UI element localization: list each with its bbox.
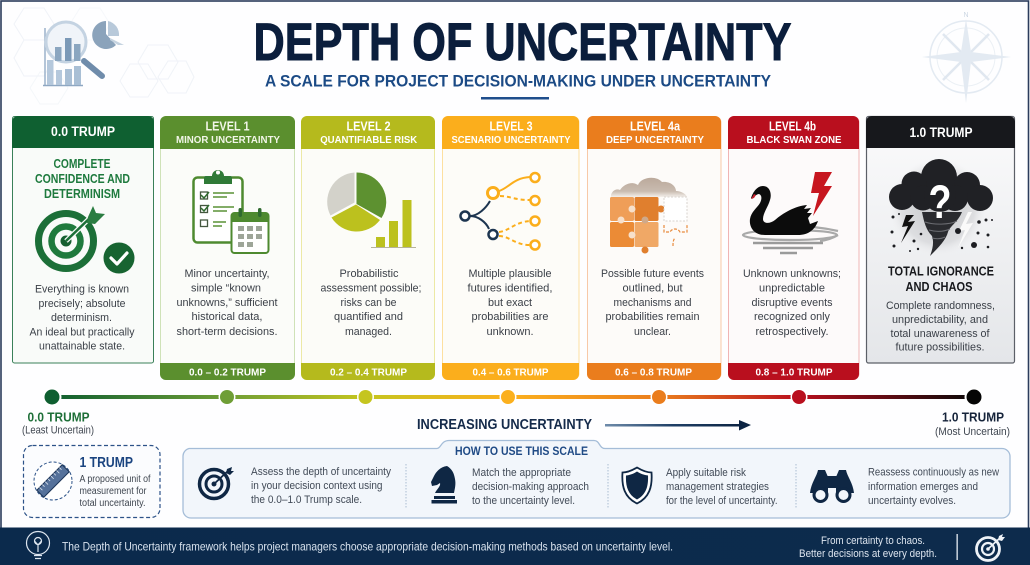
description [468, 268, 552, 338]
description: managed. [345, 326, 392, 338]
footer range [728, 363, 859, 380]
footer range [301, 363, 435, 380]
panel heading [35, 157, 130, 201]
panel: Level 4a [587, 116, 721, 380]
icon: footer target [976, 534, 1005, 560]
header [587, 116, 721, 149]
step text: uncertainty evolves. [868, 495, 956, 507]
description [601, 268, 704, 338]
step text [868, 466, 999, 507]
step text: information emerges and [868, 481, 978, 493]
panel: 1.0 Trump [866, 116, 1015, 363]
title: DEPTH OF UNCERTAINTY [254, 13, 792, 72]
step 2: match [431, 466, 589, 507]
icon: black swan and lightning [743, 172, 838, 253]
footer tagline: Better decisions at every depth. [799, 548, 937, 560]
step text [251, 466, 392, 506]
description: assessment possible; [320, 282, 422, 294]
header label [176, 120, 280, 146]
description: unclear. [634, 326, 671, 338]
description: Possible future events [601, 268, 704, 280]
callout text: A proposed unit of [80, 474, 151, 485]
description: short-term decisions. [176, 326, 278, 338]
icon: puzzle under cloud [610, 178, 687, 254]
step text [472, 467, 589, 507]
description: probabilities are [472, 311, 548, 323]
footer range: 0.4 – 0.6 TRUMP [472, 366, 548, 378]
panel: Level 2 [301, 116, 435, 380]
icon: target [200, 467, 234, 498]
header label: LEVEL 1 [206, 120, 250, 134]
footer tagline: From certainty to chaos. [821, 535, 925, 547]
header label [746, 120, 842, 146]
footer range [442, 363, 579, 380]
description: determinism. [51, 312, 112, 324]
increasing uncertainty label: INCREASING UNCERTAINTY [417, 417, 592, 433]
right scale label: 1.0 TRUMP [942, 410, 1004, 424]
panel heading: AND CHAOS [906, 280, 972, 294]
step text: Match the appropriate [472, 467, 571, 479]
description: futures identified, [468, 282, 552, 294]
description: An ideal but practically [30, 326, 135, 338]
footer range: 0.0 – 0.2 TRUMP [189, 366, 266, 378]
icon: clipboard and calendar [194, 170, 269, 253]
header [301, 116, 435, 149]
callout text: total uncertainty. [80, 498, 146, 509]
callout heading: 1 TRUMP [80, 455, 133, 471]
description: unknown. [486, 326, 534, 338]
footer range: 0.8 – 1.0 TRUMP [756, 366, 832, 378]
header label: LEVEL 2 [346, 120, 391, 134]
icon: pie chart and bars [327, 172, 416, 248]
description [30, 284, 135, 352]
footer range [160, 363, 295, 380]
callout: 1 Trump definition [24, 446, 160, 518]
description: unattainable state. [39, 340, 125, 352]
header [442, 116, 579, 149]
description: retrospectively. [756, 326, 828, 338]
description: Minor uncertainty, [184, 268, 270, 280]
header label: QUANTIFIABLE RISK [320, 134, 418, 146]
step text: for the level of uncertainty. [666, 495, 778, 507]
header [12, 116, 154, 148]
left scale label: 0.0 TRUMP [28, 410, 90, 424]
description: Multiple plausible [468, 268, 552, 280]
description: probabilities remain [606, 311, 700, 323]
description: outlined, but [622, 282, 682, 294]
step text: the 0.0–1.0 Trump scale. [251, 494, 362, 506]
panel heading: CONFIDENCE AND [35, 172, 130, 186]
header label: 0.0 TRUMP [51, 124, 115, 139]
header label: 1.0 TRUMP [910, 125, 972, 140]
description: total unawareness of [890, 328, 990, 340]
description: Probabilistic [340, 268, 399, 280]
step text: management strategies [666, 481, 770, 493]
description: simple “known [191, 282, 261, 294]
icon: light bulb [26, 532, 50, 558]
panel: how to use this scale [183, 440, 1010, 518]
panel heading: TOTAL IGNORANCE [888, 264, 994, 278]
panel: Level 3 [442, 116, 579, 380]
header label: LEVEL 3 [490, 120, 533, 134]
step text: Reassess continuously as new [868, 466, 999, 478]
footer range: 0.2 – 0.4 TRUMP [330, 366, 407, 378]
icon: chess knight [431, 466, 457, 504]
icon: shield [622, 468, 652, 504]
description [743, 268, 841, 338]
panel heading: COMPLETE [54, 157, 110, 171]
left scale label: (Least Uncertain) [22, 424, 94, 436]
icon: compass rose: N [963, 12, 969, 19]
callout text [80, 474, 151, 509]
panel: Level 1 [160, 116, 295, 380]
description: Everything is known [35, 284, 129, 296]
description [320, 268, 422, 338]
header label: LEVEL 4b [769, 120, 816, 134]
callout text: measurement for [80, 486, 147, 497]
description: unpredictability, and [892, 314, 988, 326]
icon: binoculars [810, 470, 854, 502]
icon: target with check [38, 206, 136, 275]
timeline scale [42, 388, 984, 406]
description: precisely; absolute [38, 298, 126, 310]
header [866, 116, 1015, 148]
step 3: apply [622, 467, 778, 507]
subtitle: A SCALE FOR PROJECT DECISION-MAKING UNDER UNCERTAINTY [265, 72, 772, 90]
footer message: The Depth of Uncertainty framework helps project managers choose appropriate decision-making methods based on uncertainty level. [62, 540, 673, 554]
footer tagline [799, 535, 937, 560]
description: Unknown unknowns; [743, 268, 841, 280]
description: unknowns,” sufficient [176, 297, 278, 309]
description: future possibilities. [896, 342, 984, 354]
header label [606, 120, 704, 146]
title underline [481, 97, 549, 100]
icon: compass rose [922, 12, 1011, 103]
description: historical data, [192, 311, 262, 323]
header [160, 116, 295, 149]
step 4: reassess [810, 466, 999, 507]
panel heading: DETERMINISM [44, 187, 120, 201]
panel: Level 4b [728, 116, 859, 380]
header label: LEVEL 4a [630, 120, 681, 134]
left scale label [22, 410, 94, 436]
header label: BLACK SWAN ZONE [746, 134, 842, 146]
footer range [587, 363, 721, 380]
header [728, 116, 859, 149]
description: unpredictable [759, 282, 825, 294]
step text: Apply suitable risk [666, 467, 747, 479]
icon: analytics magnifier with bars and pie chart [43, 21, 124, 86]
header label: MINOR UNCERTAINTY [176, 134, 280, 146]
right scale label: (Most Uncertain) [935, 426, 1010, 438]
description: recognized only [754, 311, 830, 323]
description: disruptive events [752, 297, 833, 309]
description: mechanisms and [614, 297, 692, 309]
header label: SCENARIO UNCERTAINTY [452, 134, 570, 146]
panel: 0.0 Trump [12, 116, 154, 363]
icon: storm with question mark: ? [928, 175, 952, 228]
panel heading [888, 264, 994, 294]
header label [452, 120, 570, 146]
step text: decision-making approach [472, 481, 589, 493]
header label: DEEP UNCERTAINTY [606, 134, 704, 146]
icon: storm with question mark [889, 158, 993, 256]
step text [666, 467, 778, 507]
description: Complete randomness, [886, 300, 995, 312]
icon: scenario tree [460, 173, 540, 250]
step text: Assess the depth of uncertainty [251, 466, 392, 478]
step 1: assess [200, 466, 392, 506]
decorative hexagon background [14, 8, 194, 104]
description [176, 268, 278, 338]
arrow [605, 420, 751, 430]
panel heading: HOW TO USE THIS SCALE [455, 444, 588, 458]
header label [320, 120, 418, 146]
description: quantified and [334, 311, 403, 323]
footer range: 0.6 – 0.8 TRUMP [615, 366, 692, 378]
description: but exact [488, 297, 532, 309]
step text: in your decision context using [251, 480, 382, 492]
footer bar [0, 528, 1030, 565]
icon: ruler [34, 462, 72, 500]
right scale label [935, 410, 1010, 438]
step text: to the uncertainty level. [472, 495, 575, 507]
description: risks can be [340, 297, 396, 309]
description [886, 300, 995, 354]
